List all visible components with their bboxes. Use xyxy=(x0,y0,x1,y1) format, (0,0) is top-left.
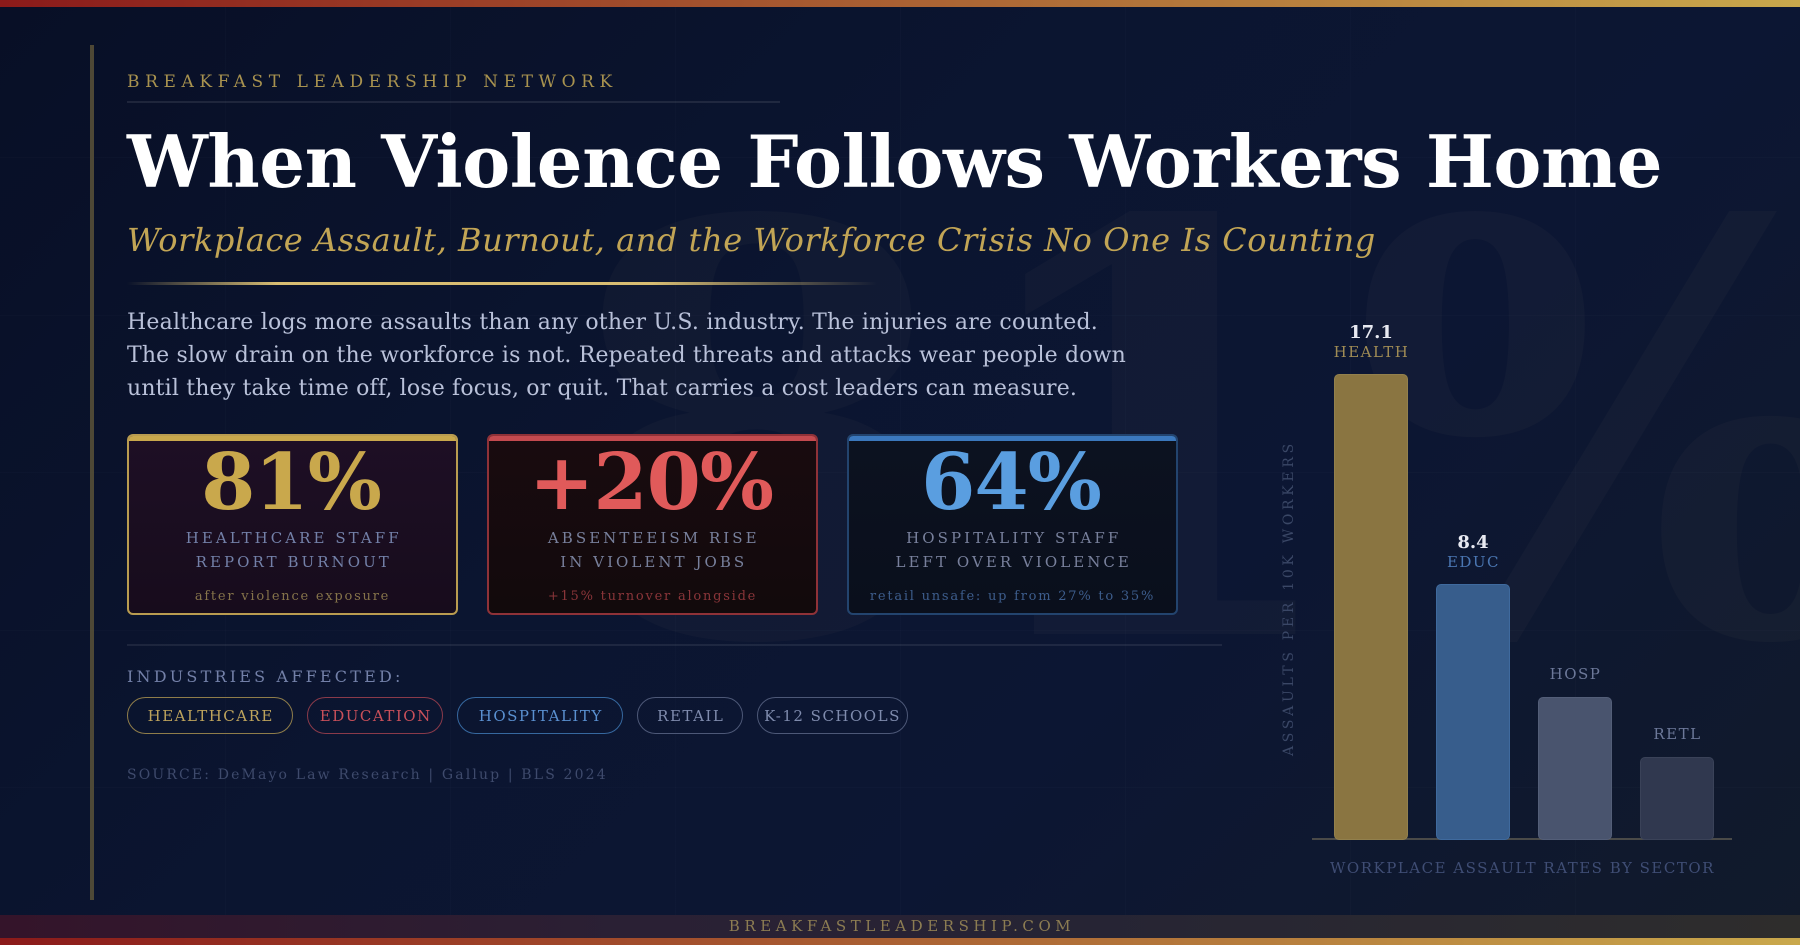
stat label: IN VIOLENT JOBS xyxy=(560,552,747,570)
value: 17.1: 17.1 xyxy=(1349,322,1393,343)
top accent bar xyxy=(0,0,1800,7)
pill: retail xyxy=(637,697,743,734)
stat label: LEFT OVER VIOLENCE xyxy=(896,552,1132,570)
stat note: retail unsafe: up from 27% to 35% xyxy=(870,589,1155,604)
stat value: +20% xyxy=(529,437,773,528)
pill: k-12 schools xyxy=(757,697,908,734)
pill: hospitality: HOSPITALITY xyxy=(479,707,603,725)
footer band xyxy=(0,915,1800,938)
stat value: 64% xyxy=(921,437,1101,528)
axis line xyxy=(1312,838,1732,840)
pill: hospitality xyxy=(457,697,623,734)
stat label: HOSPITALITY STAFF xyxy=(906,528,1121,546)
value: 8.4: 8.4 xyxy=(1457,532,1489,553)
bar: retail xyxy=(1640,757,1714,840)
bottom accent bar xyxy=(0,938,1800,945)
label: hospitality: HOSP xyxy=(1550,665,1601,683)
stat label xyxy=(548,528,760,570)
footer url: BREAKFASTLEADERSHIP.COM xyxy=(729,917,1075,935)
stat label: HEALTHCARE STAFF xyxy=(186,528,402,546)
stat card: 81% burnout xyxy=(127,434,458,615)
subtitle: Workplace Assault, Burnout, and the Workforce Crisis No One Is Counting xyxy=(127,221,1376,259)
pill: healthcare xyxy=(127,697,293,734)
eyebrow: organisation name: BREAKFAST LEADERSHIP NETWORK xyxy=(127,72,618,92)
pill: healthcare: HEALTHCARE xyxy=(148,707,274,725)
stat card: 64% hospitality xyxy=(847,434,1178,615)
pill: retail: RETAIL xyxy=(657,707,724,725)
label: health: HEALTH xyxy=(1334,343,1409,361)
stat label: REPORT BURNOUT xyxy=(196,552,392,570)
stat label: ABSENTEEISM RISE xyxy=(548,528,760,546)
left vertical bar xyxy=(90,45,94,900)
bar: hospitality xyxy=(1538,697,1612,840)
label: education: EDUC xyxy=(1447,553,1500,571)
pill: education xyxy=(307,697,443,734)
intro paragraph: until they take time off, lose focus, or quit. That carries a cost leaders can measure. xyxy=(127,376,1077,401)
stat label xyxy=(186,528,402,570)
stat value: 81% xyxy=(201,437,381,528)
intro paragraph: The slow drain on the workforce is not. Repeated threats and attacks wear people down xyxy=(127,343,1126,368)
eyebrow rule xyxy=(127,101,780,103)
title: When Violence Follows Workers Home xyxy=(127,119,1662,204)
intro paragraph xyxy=(127,310,1126,401)
gold divider xyxy=(127,282,877,285)
stat note: after violence exposure xyxy=(195,589,390,604)
bar: education xyxy=(1436,584,1510,840)
section rule xyxy=(127,644,1222,646)
pill: k-12 schools: K-12 SCHOOLS xyxy=(764,707,901,725)
intro paragraph: Healthcare logs more assaults than any other U.S. industry. The injuries are counted. xyxy=(127,310,1098,335)
y-axis label: ASSAULTS PER 10K WORKERS xyxy=(1281,440,1297,756)
chart caption: WORKPLACE ASSAULT RATES BY SECTOR xyxy=(1330,859,1715,877)
bar: health xyxy=(1334,374,1408,840)
label: retail: RETL xyxy=(1653,725,1702,743)
stat note: +15% turnover alongside xyxy=(548,589,757,604)
stat card: +20% absenteeism xyxy=(487,434,818,615)
chart: assault rates by sector xyxy=(1281,322,1732,877)
industries heading: INDUSTRIES AFFECTED: xyxy=(127,667,404,686)
stat label xyxy=(896,528,1132,570)
source line: SOURCE: DeMayo Law Research | Gallup | BLS 2024 xyxy=(127,767,608,783)
pill: education: EDUCATION xyxy=(320,707,432,725)
